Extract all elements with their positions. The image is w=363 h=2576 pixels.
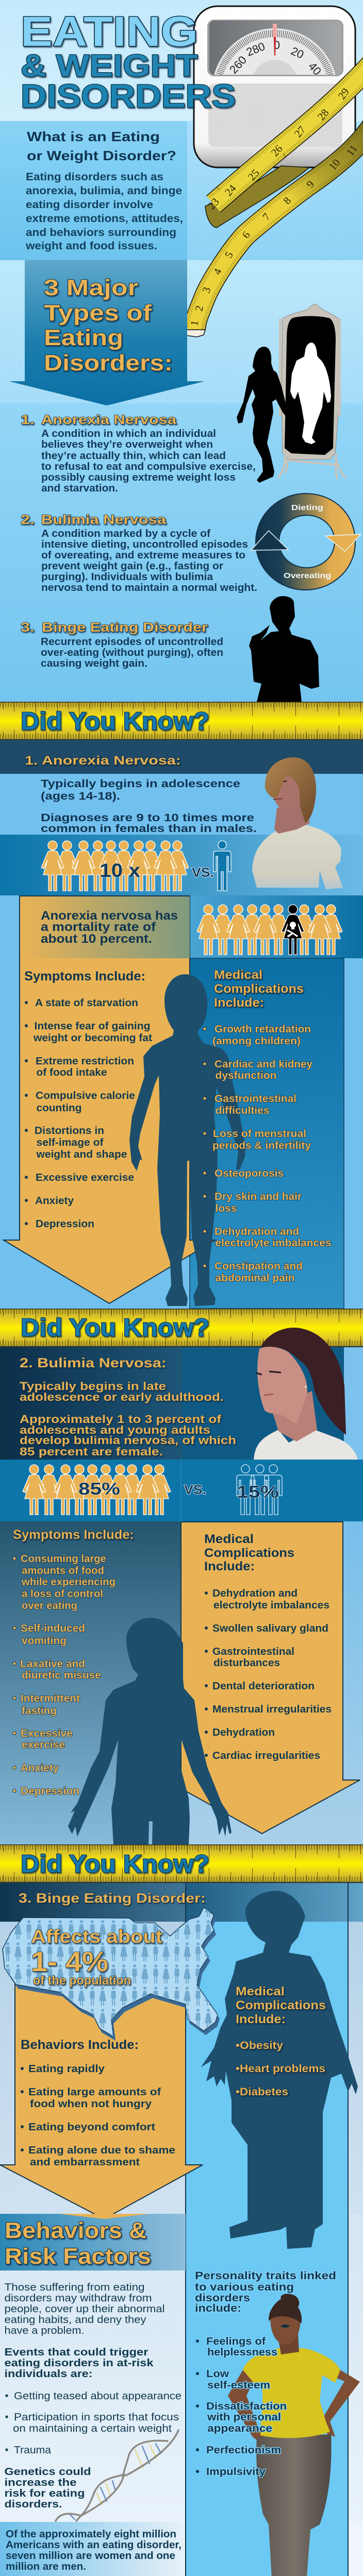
diagram: dieting and overeating cycle: Dieting — [291, 503, 323, 512]
illustration: standing woman with yellow shirt — [228, 2294, 360, 2576]
list: bulimia medical complications: Include: — [204, 1560, 255, 1573]
list: bulimia symptoms include: vomiting — [22, 1635, 67, 1647]
tape measure: 11 — [344, 143, 360, 158]
bathroom scale illustration: 260 — [227, 54, 249, 76]
list: symptoms include: Intense fear of gaining — [34, 1021, 151, 1032]
type 1: anorexia nervosa: to refusal to eat and compulsive exercise, — [41, 461, 256, 472]
heading: what is an eating disorder: What is an Eating — [27, 129, 160, 144]
facts: bulimia nervosa: Typically begins in late — [20, 1380, 166, 1393]
heading band: behaviors and risk factors: Behaviors & — [5, 2218, 146, 2243]
tape banner: did you know 3 — [0, 1844, 363, 1883]
type 3: binge eating disorder: Recurrent episodes of uncontrolled — [41, 636, 223, 648]
pictogram: 10 females vs 1 male — [41, 841, 231, 891]
list: bulimia symptoms include: Anxiety — [21, 1762, 59, 1774]
list: bulimia symptoms include: Excessive — [21, 1728, 73, 1739]
list: medical complications include: dysfunction — [216, 1070, 276, 1081]
heading: what is an eating disorder: or Weight Disorder? — [27, 148, 176, 163]
facts: bulimia nervosa: adolescents and young adults — [20, 1423, 210, 1436]
tape measure: 10 — [326, 157, 343, 173]
list: bulimia symptoms include: exercise — [22, 1739, 65, 1751]
list: medical complications include: (among children) — [212, 1036, 301, 1047]
list: personality traits: self-esteem — [207, 2380, 270, 2391]
list: bulimia medical complications: Complications — [204, 1546, 294, 1560]
arrow: 3 major types of eating disorders: Eating — [44, 325, 123, 350]
fact: mortality rate: Anorexia nervosa has — [41, 909, 178, 923]
list: binge medical complications — [236, 1985, 326, 2098]
facts: bulimia nervosa: develop bulimia nervosa, of which — [20, 1434, 236, 1447]
fact: mortality rate: about 10 percent. — [41, 932, 152, 946]
tape banner: did you know 3: Did You Know? — [21, 1851, 209, 1878]
facts: onset and sex ratio: (ages 14-18). — [41, 790, 120, 802]
pictogram: 85 percent female vs 15 percent male — [23, 1460, 282, 1521]
list: bulimia symptoms include: over eating — [22, 1600, 77, 1612]
list: personality traits: appearance — [207, 2423, 272, 2434]
panel: binge medical complications — [186, 1883, 348, 2576]
tape measure: 9 — [304, 178, 317, 190]
tape measure: 8 — [280, 194, 293, 207]
silhouette: thin woman — [237, 347, 287, 483]
text block: risk factors: Events that could trigger — [4, 2347, 148, 2358]
facts: bulimia nervosa: 2. Bulimia Nervosa: — [20, 1355, 167, 1370]
map: united states population: Affects about — [31, 1926, 162, 1947]
text block: risk factors: eating habits, and deny they — [4, 2314, 146, 2326]
list: medical complications include: Growth retardation — [214, 1024, 311, 1035]
definition text block: and behaviors surrounding — [26, 227, 176, 239]
definition text block: extreme emotions, attitudes, — [26, 213, 183, 225]
list: bulimia symptoms include: Depression — [21, 1786, 79, 1797]
text block: risk factors: Getting teased about appearance — [14, 2391, 182, 2402]
facts: onset and sex ratio — [41, 777, 257, 835]
list: bulimia medical complications: Dehydration and — [212, 1588, 298, 1599]
text block: risk factors: Participation in sports that focus — [14, 2412, 179, 2423]
facts: onset and sex ratio: common in females than in males. — [41, 822, 257, 835]
list: bulimia medical complications: Cardiac irregularities — [212, 1750, 320, 1761]
type 3: binge eating disorder — [21, 620, 223, 669]
list: bulimia medical complications: electrolyte imbalances — [213, 1600, 329, 1611]
list: bulimia symptoms include: Symptoms Include: — [13, 1528, 134, 1542]
list: bulimia medical complications: Medical — [204, 1532, 254, 1546]
text block: risk factors: on maintaining a certain weight — [13, 2423, 172, 2434]
text block: risk factors: have a problem. — [4, 2325, 85, 2336]
list: symptoms include: Excessive exercise — [36, 1172, 134, 1183]
type 1: anorexia nervosa: they’re actually thin, which can lead — [41, 450, 226, 462]
list: personality traits: Impulsivity — [206, 2466, 266, 2478]
list: medical complications include — [203, 968, 331, 1284]
definition text block: eating disorder involve — [26, 199, 153, 211]
text block: risk factors: increase the — [4, 2477, 76, 2488]
pictogram: 1 in 10 mortality — [197, 905, 342, 955]
facts: bulimia nervosa — [20, 1355, 236, 1458]
list: symptoms include: of food intake — [36, 1067, 107, 1078]
list: medical complications include: Loss of menstrual — [213, 1128, 306, 1140]
text block: risk factors: people, cover up their abnormal — [4, 2303, 165, 2315]
silhouette: person eating — [249, 596, 319, 702]
list: bulimia symptoms include: amounts of food — [22, 1565, 104, 1577]
type 2: bulimia nervosa: prevent weight gain (e.g., fasting or — [41, 561, 223, 572]
panel: medical complications 2 arrow — [0, 1521, 360, 1844]
list: bulimia symptoms include: a loss of control — [22, 1588, 103, 1600]
text block: prevalence by sex: million are men. — [6, 2561, 86, 2572]
list: personality traits: Low — [206, 2368, 229, 2380]
type 3: binge eating disorder: over-eating (without purging), often — [41, 647, 223, 658]
pictogram: 85 percent female vs 15 percent male: 15% — [237, 1482, 279, 1501]
list: behaviors include: Eating alone due to shame — [28, 2144, 175, 2156]
tape measure: 24 — [222, 182, 239, 198]
list: symptoms include — [24, 969, 152, 1230]
heading band: behaviors and risk factors — [0, 2214, 186, 2270]
pictogram: 10 females vs 1 male: VS. — [192, 866, 214, 880]
type 1: anorexia nervosa: Anorexia Nervosa — [41, 413, 177, 427]
list: bulimia medical complications: Dehydration — [212, 1727, 275, 1738]
list: personality traits: include: — [195, 2302, 241, 2314]
fact: mortality rate — [41, 909, 178, 946]
arrow: 3 major types of eating disorders: 3 Major — [44, 275, 138, 300]
list: bulimia symptoms include: Consuming large — [21, 1553, 106, 1565]
bathroom scale illustration: 40 — [306, 60, 324, 78]
list: binge medical complications: •Diabetes — [236, 2086, 288, 2098]
illustration: mirror with distorted self-image — [278, 304, 345, 479]
list: bulimia medical complications: Swollen salivary gland — [212, 1623, 328, 1634]
list: behaviors include: Eating rapidly — [28, 2063, 105, 2075]
tape measure: 3 — [200, 285, 213, 295]
list: personality traits: Dissatisfaction — [206, 2401, 287, 2412]
list: personality traits — [195, 2269, 336, 2478]
list: medical complications include: Dehydration and — [214, 1226, 299, 1238]
facts: bulimia nervosa: 85 percent are female. — [20, 1445, 163, 1458]
list: binge medical complications: Complications — [236, 1998, 326, 2012]
definition text block: anorexia, bulimia, and binge — [26, 185, 182, 197]
list: medical complications include: periods & infertility — [212, 1140, 311, 1151]
diagram: dieting and overeating cycle: Overeating — [284, 571, 331, 580]
list: symptoms include: weight or becoming fat — [33, 1032, 152, 1044]
list: behaviors include — [21, 2038, 175, 2168]
heading band: behaviors and risk factors: Risk Factors — [5, 2244, 151, 2269]
list: behaviors include: and embarrassment — [30, 2156, 140, 2168]
text block: risk factors: individuals are: — [4, 2368, 93, 2380]
text block: prevalence by sex: Americans with an eating disorder, — [6, 2539, 182, 2551]
list: symptoms include: A state of starvation — [35, 997, 138, 1009]
tape banner: did you know 2: Did You Know? — [21, 1314, 209, 1342]
text block: prevalence by sex: seven million are women and one — [6, 2550, 175, 2562]
list: personality traits: Feelings of — [206, 2336, 266, 2347]
type 2: bulimia nervosa: A condition marked by a cycle of — [41, 528, 210, 539]
list: binge medical complications: •Obesity — [236, 2040, 283, 2052]
list: medical complications include: Dry skin and hair — [214, 1191, 302, 1202]
heading: what is an eating disorder — [27, 129, 176, 163]
type 2: bulimia nervosa: 2. — [21, 513, 35, 527]
list: binge medical complications: •Heart problems — [236, 2063, 325, 2075]
text block: risk factors: disorders may withdraw from — [4, 2293, 152, 2304]
text block: risk factors: risk for eating — [4, 2488, 85, 2499]
list: behaviors include: food when not hungry — [30, 2098, 152, 2110]
list: medical complications include: Gastrointestinal — [214, 1093, 296, 1105]
list: behaviors include: Eating beyond comfort — [28, 2121, 155, 2133]
list: medical complications include: Include: — [214, 996, 264, 1010]
type 2: bulimia nervosa: purging). Individuals with bulimia — [41, 571, 213, 583]
silhouette: body figure 2 — [68, 1618, 232, 1844]
tape measure: 5 — [222, 249, 236, 260]
list: bulimia medical complications: Menstrual irregularities — [212, 1704, 332, 1715]
bathroom scale illustration: 20 — [289, 44, 306, 61]
facts: bulimia nervosa: adolescence or early adulthood. — [20, 1391, 224, 1403]
type 2: bulimia nervosa — [21, 513, 257, 594]
pictogram: 85 percent female vs 15 percent male: VS. — [184, 1483, 206, 1497]
bathroom scale illustration: 0 — [274, 39, 280, 52]
panel: medical complications 1 — [190, 958, 344, 1309]
list: medical complications include: loss — [216, 1203, 237, 1214]
facts: onset and sex ratio: Diagnoses are 9 to 10 times more — [41, 811, 254, 824]
list: medical complications include: Constipation and — [214, 1261, 303, 1272]
list: personality traits: Perfectionism — [206, 2445, 281, 2456]
text block: prevalence by sex: Of the approximately eight million — [6, 2529, 176, 2540]
list: symptoms include: counting — [36, 1103, 81, 1114]
facts: bulimia nervosa: Approximately 1 to 3 percent of — [20, 1413, 222, 1426]
tape measure: 7 — [260, 211, 273, 223]
list: medical complications include: Osteoporosis — [214, 1168, 284, 1179]
title: EATING — [21, 8, 198, 55]
map: united states population: of the population — [33, 1974, 131, 1988]
silhouette: body figure 1 — [129, 974, 245, 1306]
list: symptoms include: Extreme restriction — [36, 1056, 134, 1067]
type 1: anorexia nervosa: and starvation. — [41, 483, 118, 494]
list: bulimia symptoms include: Laxative and — [20, 1658, 85, 1670]
type 1: anorexia nervosa: believes they’re overweight when — [41, 439, 213, 450]
tape measure: 26 — [269, 142, 285, 159]
list: symptoms include: Compulsive calorie — [36, 1090, 135, 1101]
silhouette: body figure 3 — [201, 1891, 358, 2249]
fact: mortality rate: a mortality rate of — [41, 920, 156, 934]
list: bulimia symptoms include: while experiencing — [21, 1577, 116, 1588]
type 2: bulimia nervosa: intensive dieting, uncontrolled episodes — [41, 539, 248, 550]
list: bulimia medical complications: Dental deterioration — [212, 1681, 315, 1692]
pictogram: 10 females vs 1 male: 10 x — [100, 860, 140, 881]
list: symptoms include: Symptoms Include: — [24, 969, 145, 984]
type 1: anorexia nervosa: A condition in which an individual — [41, 428, 216, 439]
tape banner: did you know 1 — [0, 702, 363, 740]
list: symptoms include: self-image of — [36, 1137, 104, 1148]
type 2: bulimia nervosa: Bulimia Nervosa — [41, 513, 167, 527]
tape measure: 27 — [292, 124, 308, 140]
heading: anorexia nervosa facts: 1. Anorexia Nervosa: — [25, 754, 181, 768]
pictogram: 85 percent female vs 15 percent male: 85% — [78, 1479, 120, 1498]
list: bulimia symptoms include: fasting — [22, 1705, 57, 1717]
tape banner: did you know 2 — [0, 1309, 363, 1347]
list: personality traits: Personality traits linked — [195, 2269, 336, 2282]
bathroom scale illustration: 280 — [244, 40, 267, 59]
list: medical complications include: Cardiac and kidney — [214, 1059, 313, 1070]
list: personality traits: disorders — [195, 2292, 250, 2304]
list: binge medical complications: Medical — [236, 1985, 285, 1998]
facts: onset and sex ratio: Typically begins in adolescence — [41, 777, 240, 790]
illustration: DNA helix — [56, 2430, 178, 2521]
bathroom scale illustration — [194, 6, 355, 167]
tape banner: did you know 1: Did You Know? — [21, 708, 209, 735]
text block: risk factors: Trauma — [14, 2445, 52, 2456]
list: symptoms include: Depression — [36, 1218, 94, 1230]
definition text block: weight and food issues. — [25, 240, 157, 252]
type 1: anorexia nervosa: possibly causing extreme weight loss — [41, 472, 236, 483]
list: medical complications include: difficulties — [216, 1105, 269, 1116]
tape measure: 29 — [335, 86, 352, 101]
list: bulimia symptoms include — [13, 1528, 134, 1797]
illustration: teenage girl — [252, 757, 343, 889]
type 2: bulimia nervosa: of overeating, and extreme measures to — [41, 550, 245, 561]
text block: risk factors — [4, 2282, 182, 2510]
list: bulimia symptoms include: diuretic misuse — [22, 1670, 101, 1681]
list: medical complications include: Medical — [214, 968, 262, 982]
tape measure: 23 — [205, 195, 222, 212]
text block: risk factors: disorders. — [4, 2499, 62, 2510]
list: symptoms include: Distortions in — [35, 1125, 104, 1137]
arrow: 3 major types of eating disorders: Disorders: — [44, 350, 173, 376]
tape measure: 25 — [245, 166, 262, 183]
title: & WEIGHT — [21, 48, 197, 83]
type 2: bulimia nervosa: nervosa tend to maintain a normal weight. — [41, 582, 257, 594]
list: bulimia medical complications: disturbances — [213, 1657, 280, 1669]
type 3: binge eating disorder: 3. — [21, 620, 35, 635]
tape measure: 4 — [211, 266, 224, 277]
list: personality traits: to various eating — [195, 2281, 294, 2293]
text block: risk factors: eating disorders in at-risk — [4, 2358, 154, 2369]
panel: symptoms arrow 1 — [4, 896, 215, 1303]
list: bulimia symptoms include: Intermittent — [21, 1693, 80, 1704]
definition text block: Eating disorders such as — [26, 171, 163, 183]
list: symptoms include: Anxiety — [35, 1195, 74, 1207]
definition text block — [25, 171, 183, 252]
type 1: anorexia nervosa — [21, 413, 256, 494]
map: united states population — [3, 1907, 220, 2041]
list: personality traits: with personal — [207, 2412, 281, 2423]
list: medical complications include: Complications — [214, 982, 304, 996]
list: behaviors include: Behaviors Include: — [21, 2038, 139, 2052]
tape measure: 1 — [188, 319, 201, 327]
arrow: 3 major types of eating disorders: Types of — [44, 300, 152, 326]
tape measure: 28 — [315, 107, 332, 123]
tape measure: 2 — [192, 304, 206, 312]
list: bulimia medical complications — [204, 1532, 332, 1761]
illustration: woman with ponytail — [254, 1328, 358, 1460]
list: behaviors include: Eating large amounts of — [28, 2086, 161, 2098]
list: symptoms include: weight and shape — [36, 1149, 127, 1160]
type 3: binge eating disorder: Binge Eating Disorder — [42, 620, 208, 635]
text block: risk factors: Those suffering from eating — [4, 2282, 144, 2293]
text block: prevalence by sex — [0, 2522, 185, 2576]
title — [21, 8, 236, 114]
text block: risk factors: Genetics could — [4, 2466, 91, 2478]
map: united states population: 1- 4% — [31, 1946, 108, 1977]
list: personality traits: helplessness — [207, 2347, 277, 2358]
tape measure — [184, 62, 363, 337]
list: medical complications include: abdominal pain — [216, 1273, 295, 1284]
tape measure: 6 — [239, 229, 253, 241]
diagram: dieting and overeating cycle — [251, 494, 361, 590]
list: bulimia medical complications: Gastrointestinal — [212, 1646, 294, 1657]
list: bulimia symptoms include: Self-induced — [21, 1623, 85, 1634]
heading: binge eating disorder facts: 3. Binge Eating Disorder: — [19, 1890, 206, 1906]
type 1: anorexia nervosa: 1. — [21, 413, 35, 427]
list: binge medical complications: Include: — [236, 2012, 286, 2026]
panel: behaviors arrow — [0, 1978, 203, 2219]
list: medical complications include: electrolyte imbalances — [216, 1238, 331, 1249]
type 3: binge eating disorder: causing weight gain. — [41, 658, 147, 669]
title: DISORDERS — [21, 78, 236, 114]
arrow: 3 major types of eating disorders — [9, 260, 205, 405]
